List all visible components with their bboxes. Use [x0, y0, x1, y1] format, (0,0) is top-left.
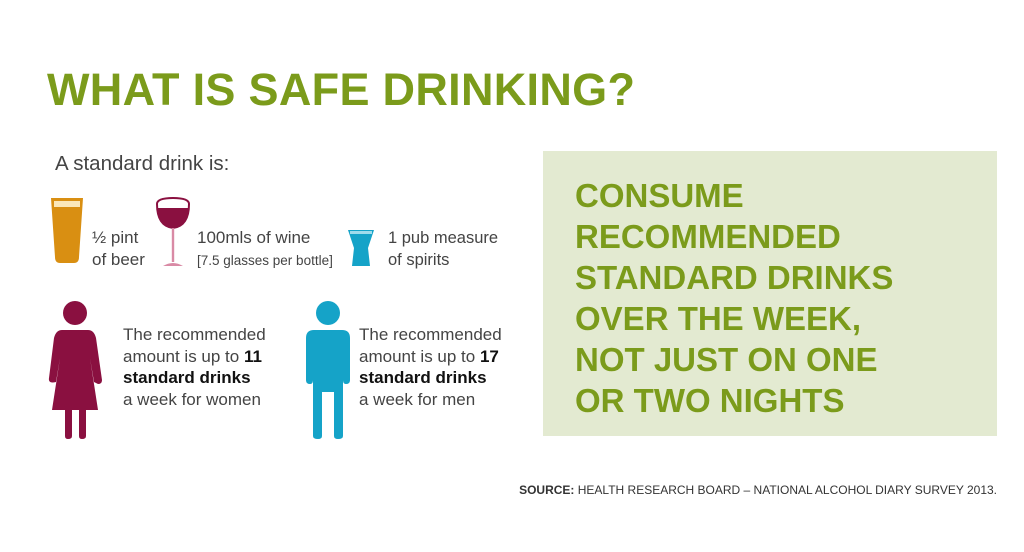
icon: wine glass — [156, 197, 190, 266]
text: beer: ½ pint — [92, 228, 138, 247]
text: women: amount is up to 11 — [123, 346, 262, 366]
icon: spirits glass — [348, 230, 374, 266]
title: WHAT IS SAFE DRINKING? — [47, 64, 635, 115]
text: women: standard drinks — [123, 368, 251, 387]
text: men: a week for men — [359, 390, 475, 408]
text: spirits — [388, 229, 498, 269]
panel text: OR TWO NIGHTS — [575, 382, 844, 419]
text: wine: [7.5 glasses per bottle] — [197, 253, 333, 268]
panel text — [575, 177, 893, 419]
panel text: NOT JUST ON ONE — [575, 341, 878, 378]
text: beer: of beer — [92, 250, 145, 269]
text: men: The recommended — [359, 325, 502, 344]
text: men — [359, 325, 502, 408]
text: women: The recommended — [123, 325, 266, 344]
icon: beer glass — [51, 198, 83, 263]
text: women: a week for women — [123, 390, 261, 408]
text: spirits: of spirits — [388, 251, 449, 269]
panel text: RECOMMENDED — [575, 218, 841, 255]
icon: man — [306, 301, 350, 439]
text: men: amount is up to 17 — [359, 346, 499, 366]
text: wine — [197, 228, 333, 268]
text: men: standard drinks — [359, 368, 487, 387]
text: spirits: 1 pub measure — [388, 229, 498, 247]
text: wine: 100mls of wine — [197, 228, 310, 247]
panel text: OVER THE WEEK, — [575, 300, 861, 337]
icon: woman — [48, 301, 102, 439]
text: beer — [92, 228, 145, 269]
panel text: STANDARD DRINKS — [575, 259, 893, 296]
panel: message — [543, 151, 997, 436]
text: women — [123, 325, 266, 408]
panel text: CONSUME — [575, 177, 744, 214]
source: SOURCE: HEALTH RESEARCH BOARD – NATIONAL ALCOHOL DIARY SURVEY 2013. — [519, 483, 997, 497]
subheading: A standard drink is: — [55, 152, 229, 175]
